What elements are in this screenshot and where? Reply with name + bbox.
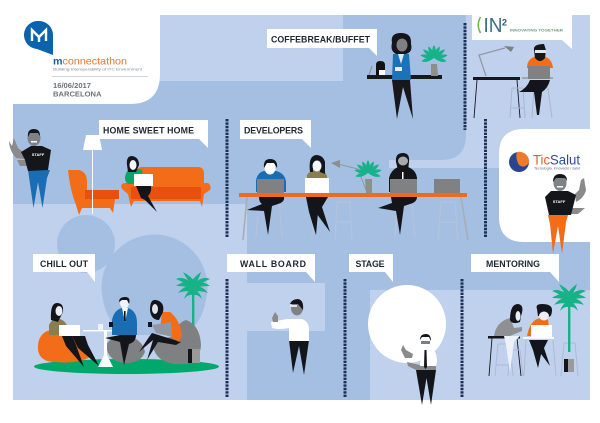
label: stage: STAGE [356,259,385,269]
label: developers [240,120,311,148]
label: mentoring [471,254,559,282]
grey bean bags [106,336,145,363]
closed laptop [434,179,460,193]
tagline: Building Interoperability of ITC Environment [53,68,143,72]
green rug [34,359,219,374]
label: coffebreak/buffet [267,29,377,56]
label: wall board: WALL BOARD [240,259,306,269]
scene: home sweet home [68,135,211,215]
logo: TicSalut: Tecnologia, innovació i salut [534,166,580,170]
scene: innovating together desk [473,44,553,118]
staff member left [9,129,51,208]
date and place: BARCELONA [53,90,102,98]
staff member left: STAFF [32,152,45,157]
palm tree [176,272,210,350]
plant [354,160,382,193]
stools [510,88,552,118]
label: home sweet home: HOME SWEET HOME [103,125,194,135]
armchair [68,170,119,215]
label: chill out [33,254,95,282]
staff member right [545,174,586,254]
label: coffebreak/buffet: COFFEBREAK/BUFFET [271,34,371,44]
scene: developers [239,153,468,240]
label: stage [349,254,393,282]
coffee machine [369,61,385,75]
logo: IN2 innovating together: 2 [502,18,507,28]
woman in orange with laptop [523,304,554,368]
plant [420,45,448,76]
icon: mconnectathon pin logo [24,21,53,55]
scene: coffee break [367,33,448,119]
scene: chill out [34,272,219,374]
orange bean bag [38,330,90,362]
divider line [52,75,148,78]
label: home sweet home [99,120,208,148]
staff member right: STAFF [553,199,566,204]
label: wall board [227,254,315,282]
developer 1 [247,159,286,235]
scene: stage speaker [401,334,437,405]
desk and lamp [473,46,520,118]
logo: TicSalut [509,152,580,172]
logo: IN2 innovating together: IN [484,15,502,37]
table and stools [488,336,578,376]
woman on sofa [125,156,157,212]
scene: wall board presenter [271,299,309,375]
dashed dividers [227,23,486,398]
desk lamp [331,160,366,190]
woman in orange [139,300,182,360]
stools [256,200,458,240]
label: mentoring: MENTORING [486,259,540,269]
header card [0,0,160,104]
table legs [243,197,468,240]
man in blue jacket [105,297,137,365]
sofa [121,167,211,207]
woman in grey [494,304,522,372]
woman with coffee [392,33,413,119]
floor lamp [83,135,102,214]
developer 2 [305,155,330,235]
label: chill out: CHILL OUT [40,259,89,269]
woman with laptop [49,303,99,367]
label: developers: DEVELOPERS [244,125,303,135]
logo: IN2 innovating together [472,15,572,49]
palm tree [552,284,586,372]
logo: IN2 innovating together: INNOVATING TOGETHER [510,28,563,32]
coffee table [367,75,442,79]
man with laptop [519,44,553,115]
logo: TicSalut: TicSalut [533,152,580,168]
developer 3 [378,153,417,235]
brand name: mconnectathon [53,56,127,68]
white cafe table [83,324,127,367]
table [239,193,467,197]
scene: mentoring [488,284,586,376]
date and place: 16/06/2017 [53,81,91,90]
